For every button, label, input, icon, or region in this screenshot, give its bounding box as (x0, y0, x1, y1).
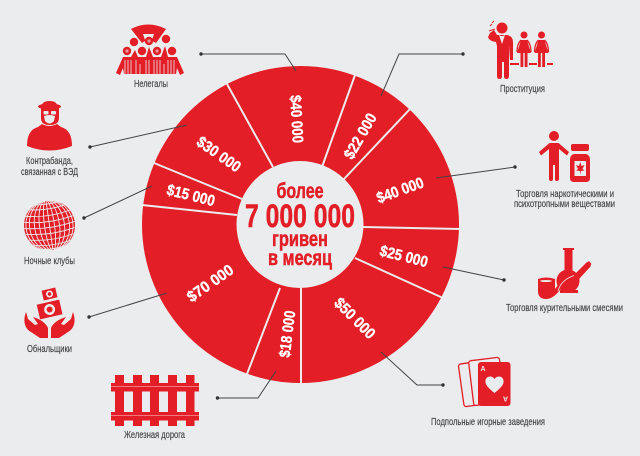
icon: railway (111, 375, 199, 426)
icon: playing cards (458, 357, 510, 407)
label: prostitution: Проституция (500, 84, 545, 95)
icon: playing cards: A (480, 366, 486, 373)
donut chart (142, 66, 460, 384)
icon: person and drug jar (539, 131, 590, 182)
leader: illegal migrants (199, 52, 296, 71)
leader: night clubs (82, 186, 152, 220)
value: illegal migrants: $40 000 (286, 95, 306, 143)
icon: smuggler (27, 101, 72, 150)
leader: smoking mixtures (443, 267, 506, 282)
label: night clubs: Ночные клубы (24, 255, 75, 267)
label: illegal migrants: Нелегалы (134, 79, 168, 90)
value: drug trade: $40 000 (374, 175, 426, 207)
central total (245, 180, 355, 270)
value: prostitution: $22 000 (341, 111, 381, 162)
label: contraband (21, 155, 78, 178)
icon: playing cards: A (503, 394, 508, 402)
leader: railway (216, 371, 276, 400)
central total: 7 000 000 (245, 198, 355, 234)
leader: gambling (381, 352, 445, 387)
leader: prostitution (381, 52, 465, 96)
value: cash-out: $70 000 (184, 262, 237, 306)
value: gambling: $50 000 (330, 295, 378, 343)
icon: prostitution figures (488, 21, 553, 79)
label: cash-out: Обнальщики (27, 343, 72, 355)
leader: drug trade (436, 165, 517, 178)
value: smoking mixtures: $25 000 (378, 243, 430, 271)
label: contraband: связанная с ВЭД (21, 167, 78, 178)
icon: illegal migrants crowd (116, 24, 184, 75)
icon: bong and pipe (538, 248, 592, 299)
central total: в месяц (268, 247, 332, 270)
central total: гривен (272, 228, 328, 251)
label: railway: Железная дорога (124, 430, 185, 441)
value: railway: $18 000 (277, 310, 299, 358)
icon: cash-out hands and money (24, 288, 75, 338)
value: contraband: $30 000 (193, 134, 244, 176)
label: contraband: Контрабанда, (26, 155, 73, 167)
icon: disco ball (21, 197, 78, 254)
label: drug trade: Торговля наркотическими и (516, 189, 614, 200)
central total: более (276, 180, 324, 203)
label: gambling: Подпольные игорные заведения (431, 417, 545, 428)
leader: cash-out (87, 293, 167, 319)
leader: contraband (88, 125, 187, 149)
label: drug trade (514, 189, 615, 210)
value: night clubs: $15 000 (165, 182, 217, 210)
